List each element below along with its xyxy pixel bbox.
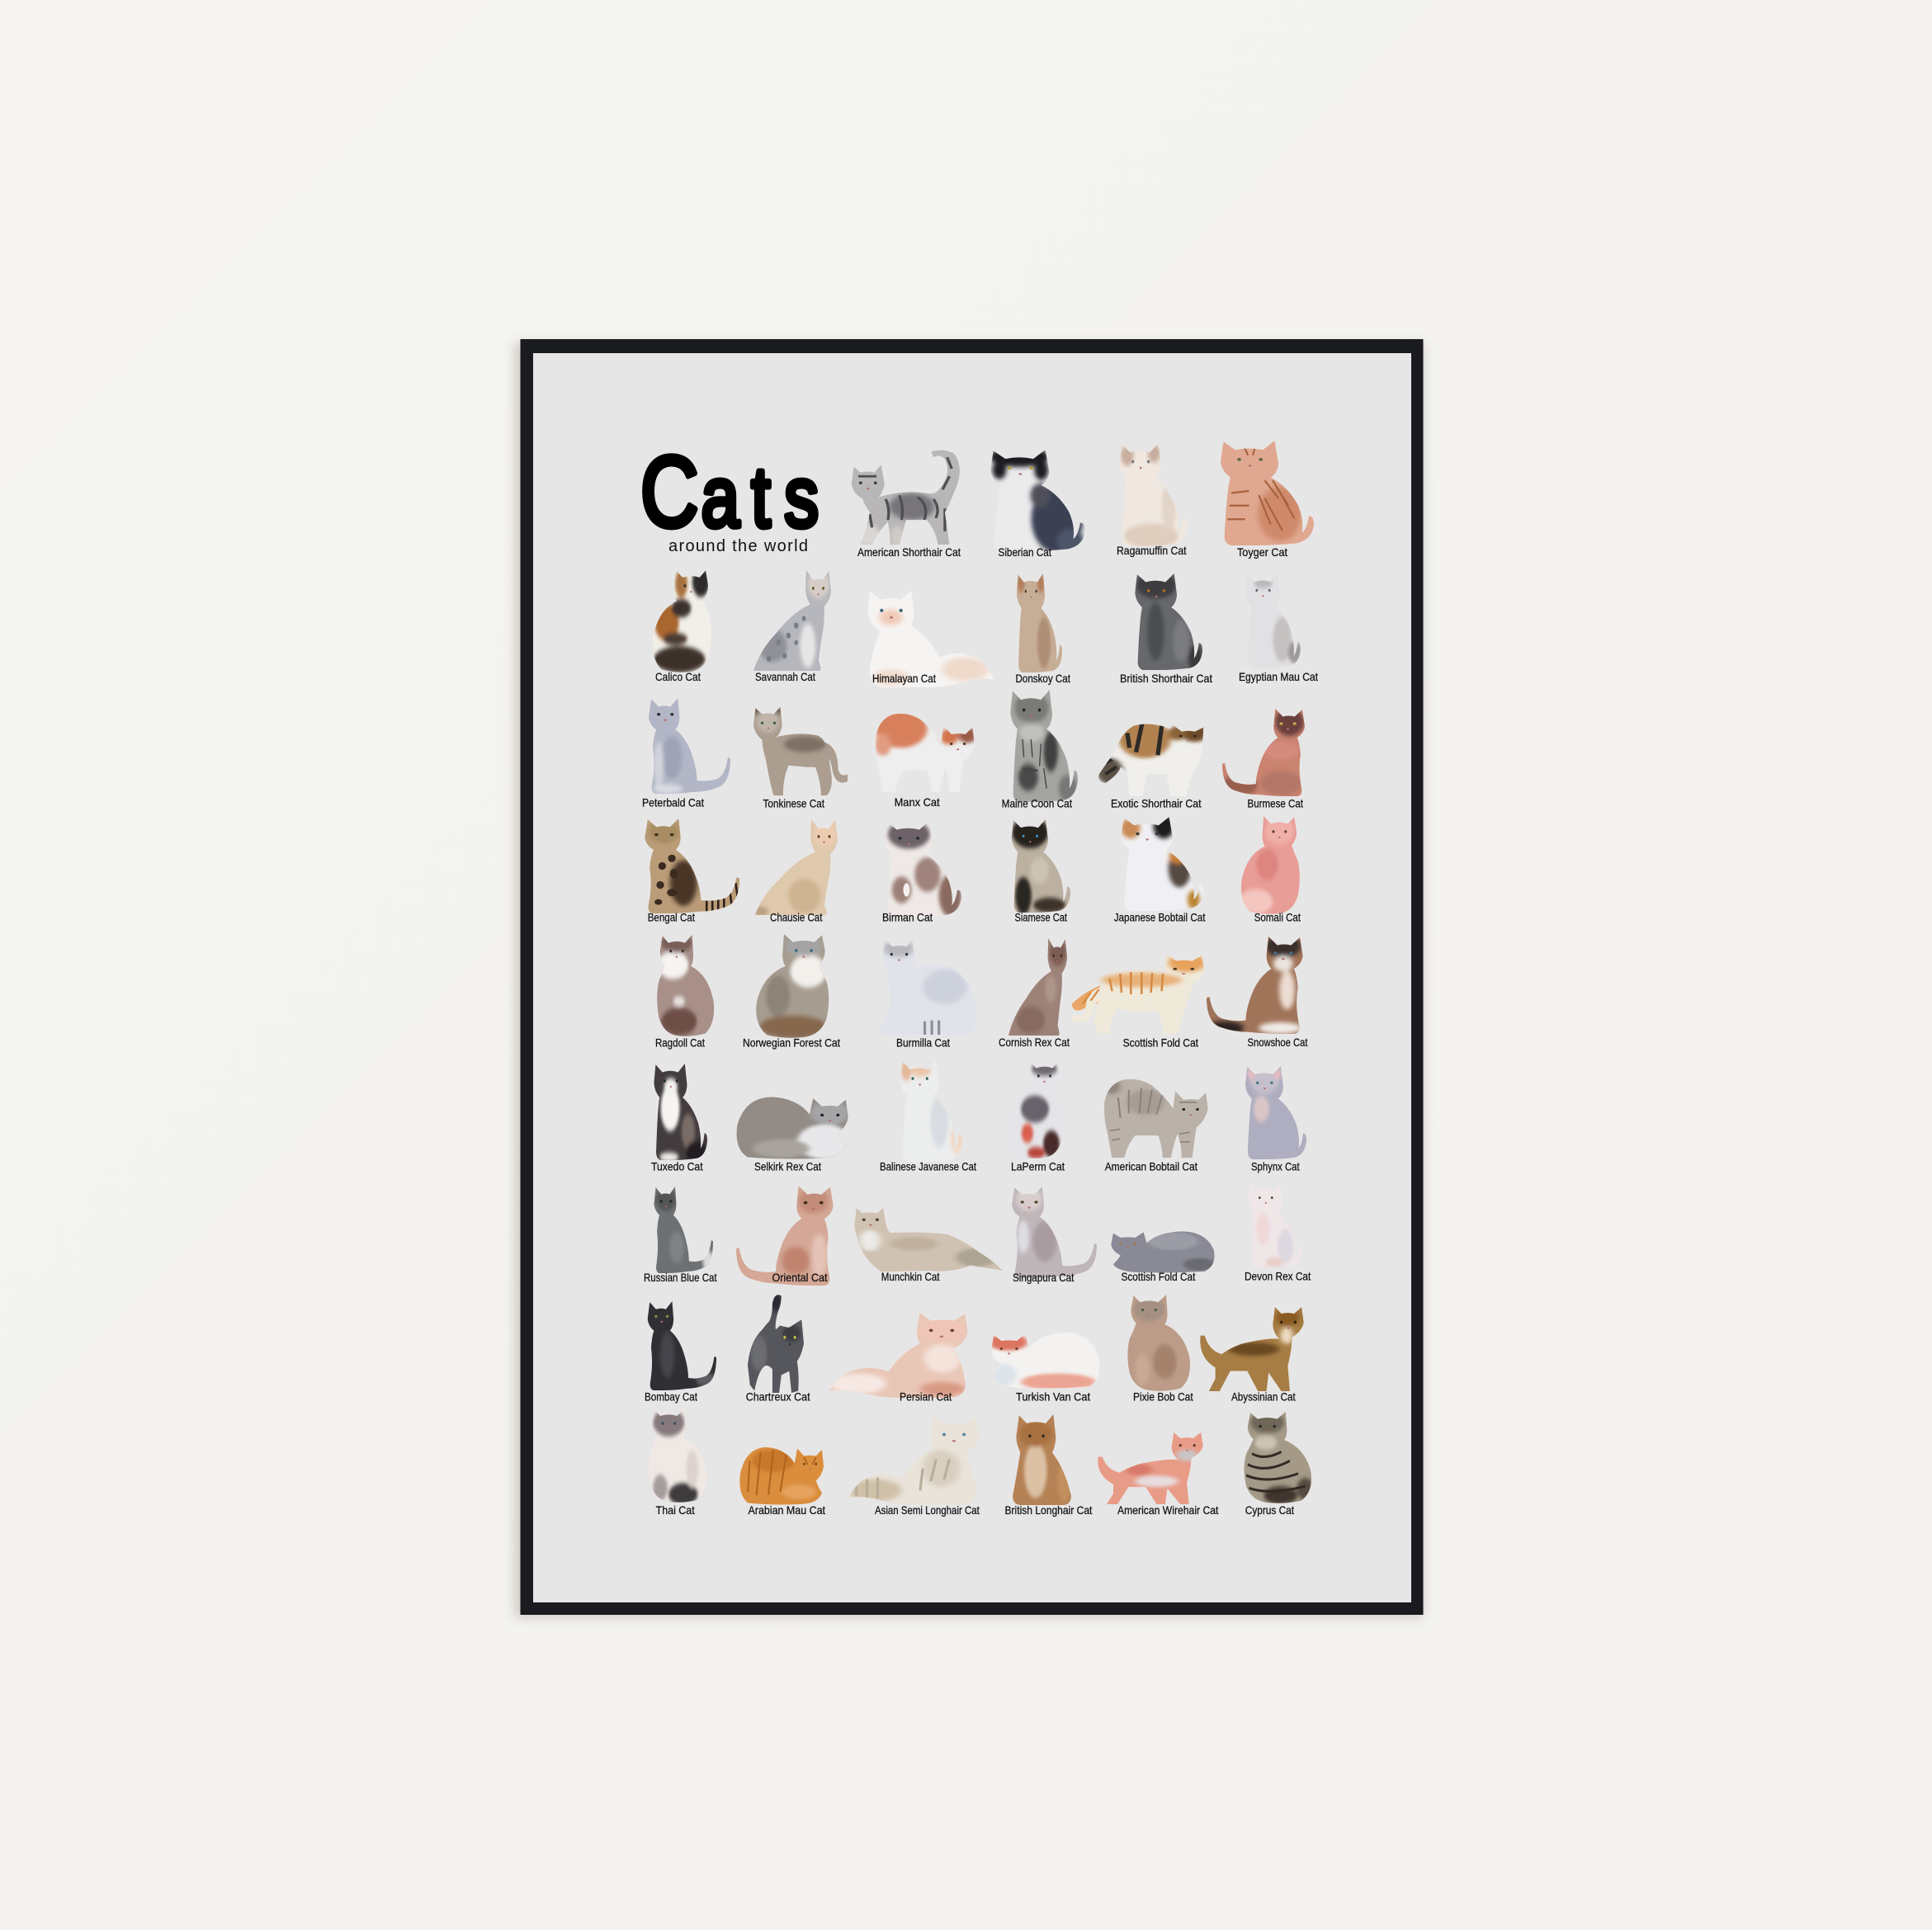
illustration xyxy=(1008,1060,1064,1158)
cat: Egyptian Mau Cat xyxy=(1239,573,1318,683)
label: Persian Cat xyxy=(900,1390,952,1403)
illustration xyxy=(1119,444,1187,546)
illustration xyxy=(876,713,974,792)
cat: Singapura Cat xyxy=(1012,1187,1097,1284)
label: Asian Semi Longhair Cat xyxy=(875,1503,980,1517)
illustration xyxy=(1205,935,1303,1035)
illustration xyxy=(654,1187,714,1273)
cat: American Bobtail Cat xyxy=(1103,1078,1208,1173)
label: Abyssinian Cat xyxy=(1231,1390,1296,1403)
illustration xyxy=(649,1409,706,1506)
label: Manx Cat xyxy=(895,795,940,809)
label: Bombay Cat xyxy=(645,1390,697,1403)
cat: Ragdoll Cat xyxy=(655,933,714,1050)
label: Bengal Cat xyxy=(648,911,695,924)
label: Ragamuffin Cat xyxy=(1117,544,1187,557)
cat: Oriental Cat xyxy=(736,1186,834,1286)
label: Thai Cat xyxy=(656,1503,695,1517)
label: Arabian Mau Cat xyxy=(748,1503,825,1517)
illustration xyxy=(1253,579,1301,665)
illustration xyxy=(1245,1066,1306,1159)
label: Somali Cat xyxy=(1254,911,1301,924)
illustration xyxy=(1127,1295,1190,1391)
label: Munchkin Cat xyxy=(881,1270,940,1283)
cat: Scottish Fold Cat xyxy=(1072,953,1206,1050)
heading: Cats: t xyxy=(751,449,771,545)
cat: Arabian Mau Cat xyxy=(739,1447,825,1517)
label: Balinese Javanese Cat xyxy=(880,1159,976,1173)
cat: Persian Cat xyxy=(829,1313,968,1403)
label: Donskoy Cat xyxy=(1015,672,1070,685)
cat: Snowshoe Cat xyxy=(1205,935,1308,1049)
cat: Chausie Cat xyxy=(752,819,838,924)
label: Peterbald Cat xyxy=(642,796,704,809)
cat: Donskoy Cat xyxy=(1015,573,1070,685)
illustration xyxy=(737,1097,852,1159)
illustration xyxy=(1241,816,1300,914)
label: Norwegian Forest Cat xyxy=(743,1036,840,1050)
illustration xyxy=(848,1416,979,1505)
illustration xyxy=(1012,819,1070,913)
illustration xyxy=(852,451,960,545)
cat: Peterbald Cat xyxy=(642,698,730,809)
illustration xyxy=(1010,690,1078,802)
title xyxy=(640,436,819,555)
label: Siamese Cat xyxy=(1015,911,1067,924)
cat: Ragamuffin Cat xyxy=(1117,443,1187,557)
illustration xyxy=(988,1333,1099,1390)
illustration xyxy=(645,819,739,913)
poster paper xyxy=(533,353,1411,1602)
label: Turkish Van Cat xyxy=(1016,1390,1090,1403)
illustration xyxy=(1098,1432,1203,1504)
illustration xyxy=(753,707,848,795)
illustration xyxy=(1013,1414,1071,1505)
cat: Maine Coon Cat xyxy=(1002,690,1078,810)
label: Maine Coon Cat xyxy=(1002,797,1072,810)
illustration xyxy=(1072,955,1205,1034)
label: Cyprus Cat xyxy=(1245,1503,1294,1517)
label: Tuxedo Cat xyxy=(651,1159,703,1173)
cat: American Wirehair Cat xyxy=(1098,1432,1218,1517)
cat: Japanese Bobtail Cat xyxy=(1114,814,1206,924)
cat: Russian Blue Cat xyxy=(644,1187,717,1284)
cat: Tonkinese Cat xyxy=(753,706,848,810)
cat: Devon Rex Cat xyxy=(1245,1182,1311,1283)
illustration xyxy=(648,1301,716,1390)
cat: Abyssinian Cat xyxy=(1200,1307,1304,1403)
label: Ragdoll Cat xyxy=(655,1036,705,1050)
heading: Cats: a xyxy=(701,449,739,545)
cat: Birman Cat xyxy=(882,820,961,924)
label: Selkirk Rex Cat xyxy=(754,1159,821,1173)
illustration xyxy=(653,570,711,672)
label: Chausie Cat xyxy=(770,911,822,924)
cat: Chartreux Cat xyxy=(746,1292,810,1403)
illustration xyxy=(1012,1187,1097,1278)
label: American Bobtail Cat xyxy=(1105,1159,1197,1173)
illustration xyxy=(1009,938,1067,1036)
label: Toyger Cat xyxy=(1237,545,1287,559)
illustration xyxy=(1245,1412,1314,1504)
frame shadow xyxy=(515,343,1423,1617)
cat: Bombay Cat xyxy=(645,1301,716,1403)
illustration xyxy=(755,819,838,915)
illustration xyxy=(654,1064,707,1164)
illustration xyxy=(1249,1182,1302,1267)
cat: British Shorthair Cat xyxy=(1120,572,1212,685)
label: American Shorthair Cat xyxy=(857,545,961,559)
cat: Cyprus Cat xyxy=(1245,1412,1314,1517)
cat: Sphynx Cat xyxy=(1245,1066,1306,1173)
label: American Wirehair Cat xyxy=(1117,1503,1218,1517)
illustration xyxy=(1103,1078,1208,1158)
label: Sphynx Cat xyxy=(1251,1159,1300,1173)
label: Siberian Cat xyxy=(999,545,1051,559)
illustration xyxy=(900,1060,964,1162)
heading: Cats: C xyxy=(640,436,698,549)
illustration xyxy=(1135,573,1202,670)
label: Egyptian Mau Cat xyxy=(1239,670,1318,683)
label: British Shorthair Cat xyxy=(1120,672,1212,685)
illustration xyxy=(748,1292,804,1393)
illustration xyxy=(756,934,829,1038)
illustration xyxy=(883,941,970,1035)
illustration xyxy=(1017,573,1062,672)
cat: Munchkin Cat xyxy=(855,1208,1003,1283)
cat: Calico Cat xyxy=(653,566,711,683)
cat: Norwegian Forest Cat xyxy=(743,934,840,1050)
cat: Toyger Cat xyxy=(1221,441,1314,559)
illustration xyxy=(855,1208,1003,1272)
picture frame xyxy=(520,339,1423,1615)
label: LaPerm Cat xyxy=(1011,1159,1065,1173)
illustration xyxy=(1111,1231,1215,1272)
label: Birman Cat xyxy=(882,911,933,924)
label: Burmilla Cat xyxy=(896,1036,950,1050)
illustration xyxy=(657,935,715,1036)
label: British Longhair Cat xyxy=(1005,1503,1092,1517)
heading: Cats: s xyxy=(784,449,819,545)
cat: Manx Cat xyxy=(875,710,976,809)
cat: LaPerm Cat xyxy=(1008,1060,1065,1173)
label: Himalayan Cat xyxy=(872,672,936,685)
cat: Cornish Rex Cat xyxy=(999,938,1070,1049)
label: Devon Rex Cat xyxy=(1245,1270,1311,1283)
illustration xyxy=(1121,817,1204,911)
subtitle: around the world xyxy=(668,537,808,555)
label: Scottish Fold Cat xyxy=(1123,1036,1198,1050)
cat: Scottish Fold Cat, lying xyxy=(1111,1231,1215,1283)
cat: Bengal Cat xyxy=(645,819,739,924)
illustration xyxy=(739,1447,824,1505)
label: Exotic Shorthair Cat xyxy=(1111,797,1202,810)
label: Chartreux Cat xyxy=(746,1390,810,1403)
illustration xyxy=(867,591,994,687)
illustration xyxy=(1222,709,1305,796)
illustration xyxy=(649,698,730,794)
illustration xyxy=(829,1313,968,1398)
illustration xyxy=(886,823,961,915)
cat: Thai Cat xyxy=(649,1409,706,1517)
cat: Somali Cat xyxy=(1239,816,1301,924)
label: Oriental Cat xyxy=(772,1271,828,1284)
label: Pixie Bob Cat xyxy=(1133,1390,1193,1403)
cat: Himalayan Cat xyxy=(867,591,994,687)
cat: Turkish Van Cat xyxy=(988,1333,1099,1403)
label: Scottish Fold Cat xyxy=(1121,1270,1195,1283)
cat: Burmese Cat xyxy=(1221,708,1305,810)
label: Japanese Bobtail Cat xyxy=(1114,911,1206,924)
cat: Burmilla Cat xyxy=(881,939,977,1050)
illustration xyxy=(1098,724,1203,796)
cat: Pixie Bob Cat xyxy=(1127,1295,1193,1403)
cat: Siamese Cat xyxy=(1012,817,1070,924)
illustration xyxy=(753,570,831,671)
illustration xyxy=(736,1186,834,1286)
label: Russian Blue Cat xyxy=(644,1271,717,1284)
illustration xyxy=(1200,1307,1304,1391)
label: Cornish Rex Cat xyxy=(999,1036,1070,1049)
cat: Savannah Cat xyxy=(753,570,831,683)
cat: Balinese Javanese Cat xyxy=(880,1060,976,1173)
illustration xyxy=(990,450,1085,551)
label: Singapura Cat xyxy=(1013,1271,1074,1284)
cat: Exotic Shorthair Cat xyxy=(1097,720,1208,810)
illustration xyxy=(1221,441,1314,545)
cat: Siberian Cat xyxy=(990,446,1085,559)
cat: Tuxedo Cat xyxy=(651,1064,707,1173)
label: Savannah Cat xyxy=(755,670,815,683)
label: Burmese Cat xyxy=(1248,797,1303,810)
label: Snowshoe Cat xyxy=(1248,1036,1308,1049)
cat: American Shorthair Cat xyxy=(852,450,961,559)
label: Calico Cat xyxy=(655,670,701,683)
cat: Selkirk Rex Cat xyxy=(737,1097,852,1173)
cat: Asian Semi Longhair Cat xyxy=(848,1416,980,1517)
cat: British Longhair Cat xyxy=(1005,1414,1092,1517)
label: Tonkinese Cat xyxy=(763,797,824,810)
